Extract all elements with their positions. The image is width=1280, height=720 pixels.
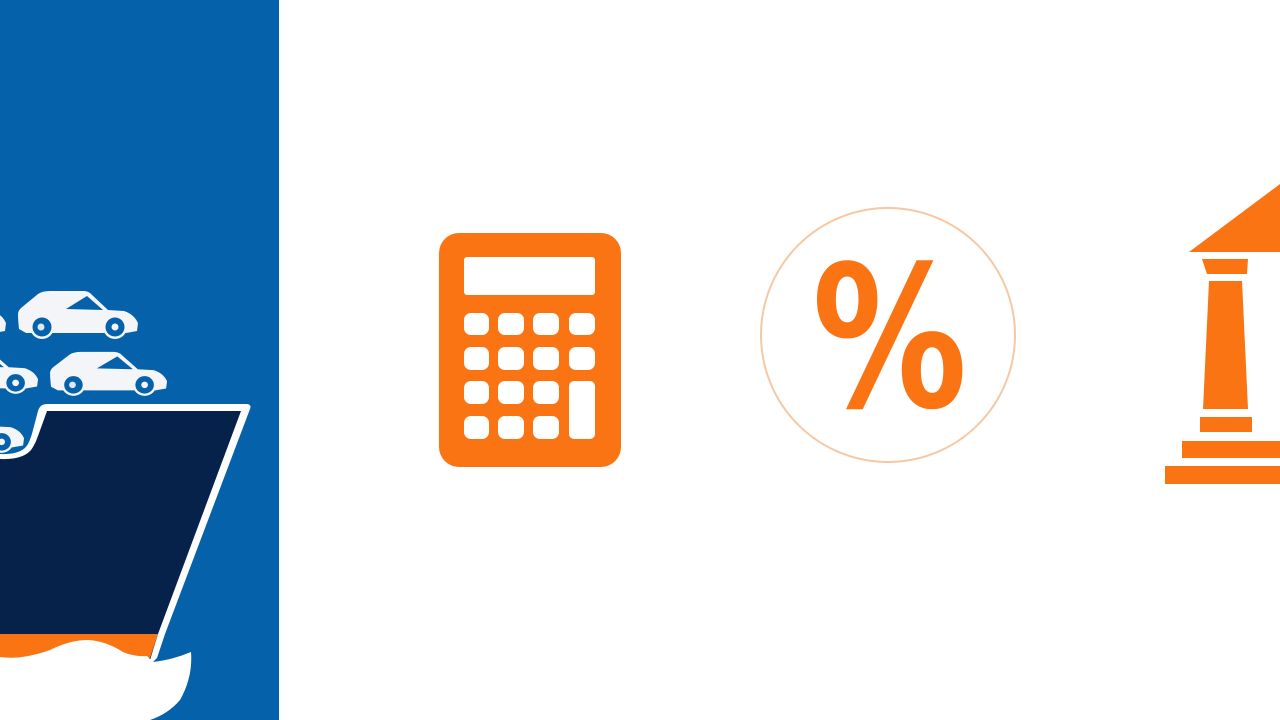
icon: percent in circle — [761, 208, 1015, 462]
icon: ship hull — [0, 404, 250, 720]
icon: calculator — [439, 233, 621, 467]
icon: bank column — [1165, 184, 1280, 484]
panel: blue ship panel — [0, 0, 279, 720]
icon: cars on deck — [0, 291, 167, 453]
icon: percent in circle: % — [812, 223, 967, 453]
